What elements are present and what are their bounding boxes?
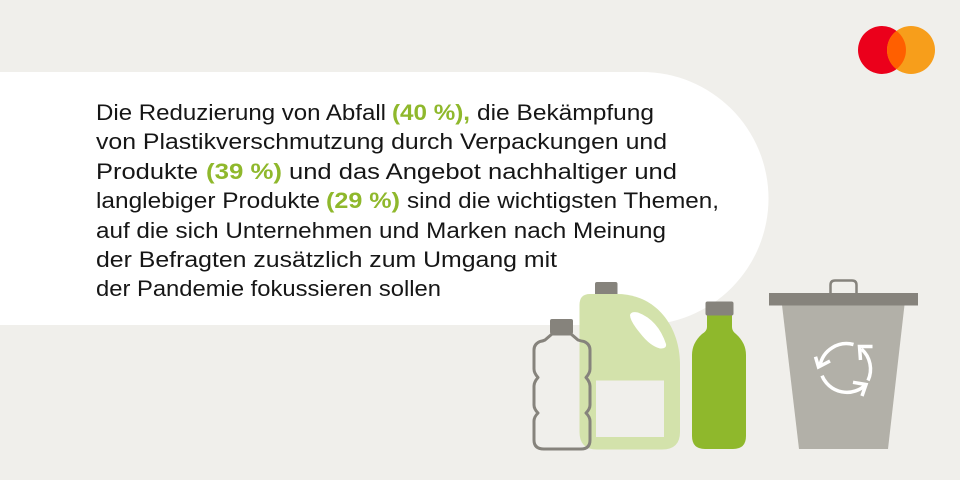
text block: main statement: von Plastikverschmutzung durch Verpackungen und (96, 129, 667, 154)
text block: main statement: (29 %) (326, 188, 400, 213)
text block: main statement: der Befragten zusätzlich zum Umgang mit (96, 247, 557, 272)
text block: main statement: sind die wichtigsten Themen, (407, 188, 719, 213)
icon: green bottle (692, 302, 746, 449)
text block: main statement: der Pandemie fokussieren sollen (96, 276, 441, 301)
text block: main statement: auf die sich Unternehmen und Marken nach Meinung (96, 218, 666, 243)
panel: white rounded banner (0, 72, 768, 325)
icon: recycling arrows (816, 344, 872, 396)
text block: main statement: (39 %) (206, 159, 282, 184)
text block: main statement: die Bekämpfung (477, 100, 654, 125)
logo: two overlapping circles (858, 26, 935, 74)
icon: plastic bottle outline (534, 319, 590, 449)
icon: large jug (580, 282, 680, 450)
icon: recycling bin (769, 280, 918, 449)
text block: main statement: Die Reduzierung von Abfall (96, 100, 386, 125)
text block: main statement: (40 %), (392, 100, 470, 125)
text block: main statement: und das Angebot nachhaltiger und (289, 159, 677, 184)
text block: main statement (96, 100, 719, 301)
text block: main statement: langlebiger Produkte (96, 188, 320, 213)
text block: main statement: Produkte (96, 159, 198, 184)
